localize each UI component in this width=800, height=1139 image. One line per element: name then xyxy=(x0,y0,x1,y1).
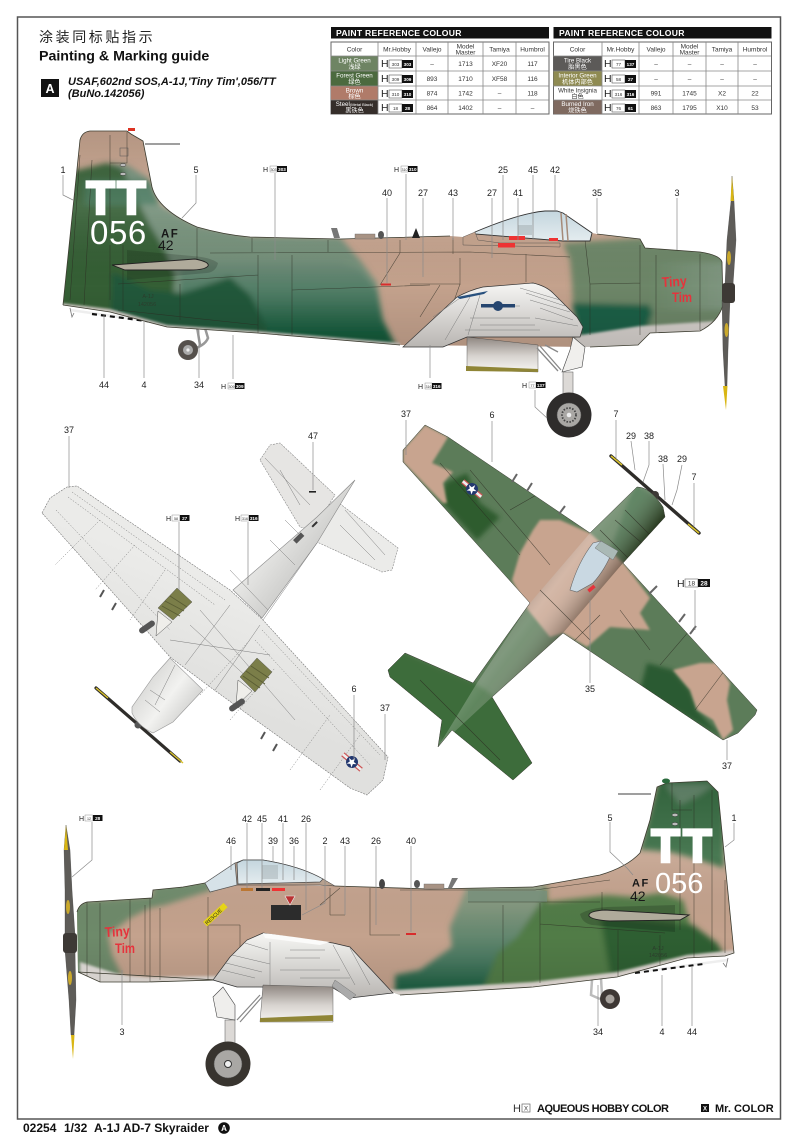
tiny tim nose art right: Tiny xyxy=(104,923,130,940)
rear fuselage underside xyxy=(233,480,355,618)
paint reference table 2: Mr.Hobby xyxy=(607,46,635,54)
callouts: top view: 29 xyxy=(626,431,636,441)
underside pylons xyxy=(100,590,277,751)
paint reference table 1: 118 xyxy=(527,90,538,98)
callouts: right side profile: 40 xyxy=(406,836,416,846)
callouts: right side profile: 28 xyxy=(95,816,101,821)
main wing underside xyxy=(42,486,388,795)
callouts: left side profile: 44 xyxy=(99,380,109,390)
callouts: right side profile xyxy=(72,813,737,1037)
callouts: left side profile: 5 xyxy=(193,165,199,175)
wheel well left xyxy=(138,588,192,636)
main landing gear xyxy=(537,337,592,438)
marking: AF 42: AF xyxy=(161,228,179,240)
callouts: right side profile: H xyxy=(79,816,84,823)
paint reference table 1: 18 xyxy=(393,106,398,111)
paint reference table 1: Forest Green xyxy=(336,72,373,80)
star and bar seen on underside xyxy=(481,301,515,311)
scheme description: USAF,602nd SOS,A-1J,'Tiny Tim',056/TT xyxy=(68,76,277,88)
paint tag H18 28: 18 xyxy=(688,580,695,588)
callouts: underside view: 47 xyxy=(308,431,318,441)
scheme description: (BuNo.142056) xyxy=(68,88,145,100)
tail wheel right xyxy=(591,978,620,1009)
tail wheel xyxy=(178,327,208,360)
paint reference table 2: 77 xyxy=(616,62,621,67)
paint reference table 2: Tamiya xyxy=(712,46,733,54)
canopy xyxy=(463,211,592,248)
paint reference table 1: H xyxy=(381,73,389,85)
callouts: right side profile: 5 xyxy=(607,813,613,823)
callouts: top view: 7 xyxy=(613,409,619,419)
paint reference table 1: – xyxy=(430,61,434,68)
legend: paint brands xyxy=(513,1103,774,1115)
paint reference table 1: 棕色 xyxy=(348,92,361,100)
paint reference table 2: White Insignia xyxy=(558,88,597,94)
paint reference table 1: 绿色 xyxy=(348,78,361,86)
callouts: top view: 29 xyxy=(677,454,687,464)
marking right: 056: 056 xyxy=(655,868,703,900)
callouts: left side profile: 27 xyxy=(418,188,428,198)
callouts: underside view: H xyxy=(166,516,171,523)
aircraft: top view xyxy=(388,424,758,780)
paint reference table 1: PAINT REFERENCE COLOUR xyxy=(336,28,462,38)
paint reference table 1: Color xyxy=(347,46,363,54)
callouts: underside view: 58 xyxy=(174,517,178,521)
legend: paint brands: X xyxy=(524,1106,528,1112)
black walkway panel and rescue tag: RESCUE xyxy=(204,907,224,926)
callouts: top view: 37 xyxy=(401,409,411,419)
callouts: right side profile: 43 xyxy=(340,836,350,846)
top view camouflage xyxy=(388,425,757,780)
tiny tim nose art: Tim xyxy=(672,289,692,305)
callouts: left side profile: 25 xyxy=(498,165,508,175)
marking: AF 42: 42 xyxy=(158,237,174,253)
callouts: left side profile: 35 xyxy=(592,188,602,198)
callouts: underside view: 27 xyxy=(182,516,188,521)
callouts: left side profile: 40 xyxy=(382,188,392,198)
paint reference table 2: 53 xyxy=(751,105,759,112)
paint reference table 2: H xyxy=(604,102,612,114)
propeller xyxy=(722,176,736,410)
paint reference table 2: Interior Green xyxy=(558,72,597,80)
callouts: underside view: 316 xyxy=(250,516,258,521)
paint reference table 1: 116 xyxy=(527,76,538,83)
callouts: left side profile: 45 xyxy=(528,165,538,175)
paint reference table 1: 黑铁色 xyxy=(345,106,364,114)
callouts: right side profile: 45 xyxy=(257,814,267,824)
right propeller xyxy=(63,825,77,1059)
paint reference table 2: X10 xyxy=(716,105,728,112)
scheme badge A xyxy=(41,79,59,97)
right fuselage outline xyxy=(77,781,734,995)
paint reference table 1: Light Green xyxy=(338,58,371,64)
paint reference table 1: Master xyxy=(456,50,476,56)
aircraft: right side profile xyxy=(63,775,740,1086)
paint reference table 2: Humbrol xyxy=(743,46,768,54)
right canopy xyxy=(205,860,335,892)
propeller underside xyxy=(96,688,183,763)
paint reference table 2: 27 xyxy=(628,77,633,82)
title block xyxy=(39,29,209,64)
paint tag H18 28 xyxy=(677,578,710,590)
paint reference table 1: 1710 xyxy=(458,76,473,83)
paint reference table 2: 863 xyxy=(651,105,662,112)
callouts: top view: 38 xyxy=(658,454,668,464)
paint reference table 2: 烧铁色 xyxy=(568,106,587,114)
marking right: serial: 142056 xyxy=(649,953,667,959)
right back details xyxy=(379,878,458,889)
callouts: left side profile: 309 xyxy=(228,385,234,389)
paint reference table 1: 303 xyxy=(392,62,400,67)
callouts: right side profile: 44 xyxy=(687,1027,697,1037)
paint reference table 2: 316 xyxy=(627,92,635,97)
aircraft: underside view xyxy=(42,443,398,795)
paint reference table 1 xyxy=(331,27,549,114)
paint reference table 1: Humbrol xyxy=(520,46,545,54)
callouts: left side profile: H xyxy=(221,384,226,391)
callouts: right side profile: 26 xyxy=(371,836,381,846)
callouts: underside view: 6 xyxy=(351,684,357,694)
aircraft: left side profile xyxy=(55,125,736,438)
callouts: left side profile: 42 xyxy=(550,165,560,175)
callouts: left side profile: 1 xyxy=(60,165,66,175)
tailplane stub xyxy=(112,250,218,280)
callouts: left side profile: 309 xyxy=(236,384,244,389)
callouts: left side profile: 41 xyxy=(513,188,523,198)
callouts: left side profile: 303 xyxy=(278,167,286,172)
under-wing tank xyxy=(466,337,538,372)
marking: AF 42 xyxy=(158,228,179,253)
paint reference table 2: Model xyxy=(681,44,699,50)
callouts: right side profile: 2 xyxy=(322,836,328,846)
callouts: right side profile: 1 xyxy=(731,813,737,823)
tailplane underside far xyxy=(317,500,398,572)
marking right: AF 42: 42 xyxy=(630,888,646,904)
paint reference table 1: H xyxy=(381,102,389,114)
paint reference table 1: – xyxy=(531,105,535,112)
paint reference table 2: 137 xyxy=(627,62,635,67)
right tailplane stub xyxy=(580,905,689,932)
callouts: right side profile: 39 xyxy=(268,836,278,846)
marking: serial xyxy=(138,294,156,308)
paint reference table 1: Tamiya xyxy=(489,46,510,54)
legend: paint brands: H xyxy=(513,1103,521,1115)
callouts: left side profile: H xyxy=(394,167,399,174)
footer product line: 02254 xyxy=(23,1121,57,1135)
legend: paint brands: AQUEOUS HOBBY COLOR xyxy=(537,1103,669,1115)
callouts: left side profile: 3 xyxy=(674,188,680,198)
marking: serial: 142056 xyxy=(138,302,156,308)
callouts: left side profile xyxy=(60,165,680,418)
callouts: right side profile: 36 xyxy=(289,836,299,846)
callouts: right side profile: 12 xyxy=(87,817,91,821)
paint reference table 2: 61 xyxy=(628,106,633,111)
paint reference table 2: Vallejo xyxy=(646,46,666,54)
callouts: top view xyxy=(401,409,732,771)
top view pylons xyxy=(512,474,696,634)
scheme A caption xyxy=(41,76,277,100)
callouts: right side profile: 34 xyxy=(593,1027,603,1037)
paint reference table 2: 胎黑色 xyxy=(568,63,587,71)
right fuselage camouflage xyxy=(70,775,740,1005)
tiny tim nose art right xyxy=(104,923,135,956)
callouts: left side profile: 316 xyxy=(426,385,432,389)
top view fuselage spine xyxy=(438,487,665,747)
national insignia underside xyxy=(339,750,365,774)
paint reference table 2: H xyxy=(604,73,612,85)
marking right: TT: TT xyxy=(652,820,712,872)
fin tip details xyxy=(120,128,420,239)
paint tag H18 28: H xyxy=(677,578,685,590)
callouts: left side profile: 43 xyxy=(448,188,458,198)
callouts: right side profile: 26 xyxy=(301,814,311,824)
paint reference table 2 xyxy=(553,27,772,114)
callouts: underside view: H xyxy=(235,516,240,523)
callouts: left side profile: 4 xyxy=(141,380,147,390)
callouts: underside view: 37 xyxy=(380,703,390,713)
paint reference table 1: Mr.Hobby xyxy=(383,46,412,54)
paint reference table 1: 309 xyxy=(392,77,400,82)
paint reference table 1: 864 xyxy=(427,105,438,112)
underside panel detail xyxy=(55,458,385,790)
paint reference table 1: 893 xyxy=(427,76,438,83)
footer product line xyxy=(23,1121,230,1135)
callouts: right side profile: 4 xyxy=(659,1027,665,1037)
callouts: right side profile: 42 xyxy=(242,814,252,824)
wing in profile xyxy=(403,283,583,347)
tiny tim nose art right: Tim xyxy=(115,940,135,956)
paint reference table 2: Tire Black xyxy=(564,58,592,64)
panel lines xyxy=(70,132,700,335)
footer product line: 1/32 xyxy=(64,1121,88,1135)
marking right: serial xyxy=(649,946,667,959)
paint reference table 1: XF58 xyxy=(492,76,508,83)
right wing in profile xyxy=(213,933,393,1000)
paint reference table 2: 76 xyxy=(616,106,621,111)
callouts: right side profile: 41 xyxy=(278,814,288,824)
footer product line: A-1J AD-7 Skyraider xyxy=(94,1121,209,1135)
callouts: top view: 6 xyxy=(489,410,495,420)
right under-wing tank xyxy=(260,985,333,1022)
paint reference table 2: PAINT REFERENCE COLOUR xyxy=(559,28,685,38)
fuselage outline xyxy=(63,131,723,347)
paint reference table 2: 白色 xyxy=(571,92,584,100)
right landing gear xyxy=(206,987,262,1086)
paint reference table 2: – xyxy=(654,61,658,68)
paint tag H18 28: 28 xyxy=(700,580,708,588)
paint reference table 1: – xyxy=(498,105,502,112)
callouts: left side profile: H xyxy=(522,383,527,390)
callouts: left side profile: 27 xyxy=(487,188,497,198)
marking right: AF 42 xyxy=(630,878,650,904)
paint reference table 2: 316 xyxy=(615,92,623,97)
legend: paint brands: Mr. COLOR xyxy=(715,1103,774,1115)
paint reference table 2: Master xyxy=(680,50,700,56)
paint reference table 2: – xyxy=(753,76,757,83)
paint reference table 2: 1745 xyxy=(682,90,697,98)
tiny tim nose art: Tiny xyxy=(661,273,687,290)
paint reference table 1: 310 xyxy=(392,92,400,97)
marking right: serial: A-1J xyxy=(652,946,664,952)
callouts: left side profile: 303 xyxy=(270,168,276,172)
marking: TT: TT xyxy=(86,172,146,224)
callouts: left side profile: 310 xyxy=(402,168,408,172)
paint reference table 2: H xyxy=(604,58,612,70)
paint reference table 1: 1713 xyxy=(458,61,473,68)
paint reference table 1: 1742 xyxy=(458,90,473,98)
paint reference table 1: 浅绿 xyxy=(348,63,361,71)
paint reference table 1: Vallejo xyxy=(422,46,442,54)
black walkway panel and rescue tag xyxy=(203,896,301,927)
paint reference table 1: Brown xyxy=(346,88,364,94)
scheme marker: A xyxy=(221,1124,227,1133)
callouts: left side profile: 310 xyxy=(409,167,417,172)
paint reference table 2: 991 xyxy=(651,90,662,98)
callouts: left side profile: H xyxy=(418,384,423,391)
paint reference table 1: Model xyxy=(457,44,475,50)
paint reference table 2: Burned Iron xyxy=(561,101,594,108)
tiny tim nose art xyxy=(661,273,692,305)
paint reference table 1: H xyxy=(381,58,389,70)
callouts: underside view: 316 xyxy=(242,517,248,521)
paint reference table 1: 1402 xyxy=(458,105,473,112)
arresting hook xyxy=(70,308,162,323)
paint reference table 1: 310 xyxy=(404,92,412,97)
callouts: top view: 7 xyxy=(691,472,697,482)
paint reference table 2: – xyxy=(720,61,724,68)
legend: paint brands: X xyxy=(703,1106,707,1112)
national insignia top xyxy=(459,477,485,501)
right fin tip xyxy=(618,778,678,826)
marking: serial: A-1J xyxy=(142,294,154,300)
belly highlight xyxy=(574,320,714,347)
paint reference table 2: Color xyxy=(570,46,586,54)
paint reference table 2: – xyxy=(654,76,658,83)
paint reference table 2: 机体内部色 xyxy=(562,78,593,86)
scheme marker xyxy=(218,1122,230,1134)
paint reference table 1: 28 xyxy=(405,106,410,111)
callouts: left side profile: 77 xyxy=(530,384,534,388)
callouts: underside view: 37 xyxy=(64,425,74,435)
paint reference table 1: Steel(Metal Black) xyxy=(336,101,374,108)
fuselage camouflage xyxy=(55,125,735,355)
paint reference table 1: H xyxy=(381,88,389,100)
callouts: top view: 38 xyxy=(644,431,654,441)
paint reference table 1: 874 xyxy=(427,90,438,98)
top view propeller xyxy=(611,456,699,533)
nose underside xyxy=(132,658,203,733)
wheel well right xyxy=(228,658,272,713)
callouts: left side profile: H xyxy=(263,167,268,174)
callouts: left side profile: 137 xyxy=(537,383,545,388)
paint reference table 1: XF20 xyxy=(492,61,508,68)
marking: 056: 056 xyxy=(90,214,147,251)
paint reference table 2: – xyxy=(688,76,692,83)
paint reference table 2: – xyxy=(720,76,724,83)
callouts: top view: 35 xyxy=(585,684,595,694)
callouts: top view: 37 xyxy=(722,761,732,771)
callouts: right side profile: 3 xyxy=(119,1027,125,1037)
top view outline xyxy=(388,425,757,780)
english title: Painting & Marking guide xyxy=(39,48,209,64)
paint reference table 2: X2 xyxy=(718,90,726,98)
arresting hook right xyxy=(630,958,728,973)
paint reference table 2: – xyxy=(753,61,757,68)
paint reference table 1: 303 xyxy=(404,62,412,67)
paint reference table 1: 309 xyxy=(404,77,412,82)
paint reference table 1: – xyxy=(498,90,502,98)
callouts: underside view xyxy=(64,425,390,760)
tailplane underside xyxy=(260,443,335,530)
paint reference table 1: 117 xyxy=(527,61,538,68)
paint reference table 2: – xyxy=(688,61,692,68)
paint reference table 2: 22 xyxy=(751,90,759,98)
paint reference table 2: H xyxy=(604,88,612,100)
callouts: left side profile: 316 xyxy=(433,384,441,389)
chinese title: 涂装同标贴指示 xyxy=(39,29,155,45)
callouts: right side profile: 46 xyxy=(226,836,236,846)
callouts: left side profile: 34 xyxy=(194,380,204,390)
paint reference table 2: 1795 xyxy=(682,105,697,112)
scheme badge A: A xyxy=(45,82,55,96)
paint reference table 2: 58 xyxy=(616,77,621,82)
top view canopy xyxy=(570,541,618,592)
marking right: AF 42: AF xyxy=(632,878,650,890)
